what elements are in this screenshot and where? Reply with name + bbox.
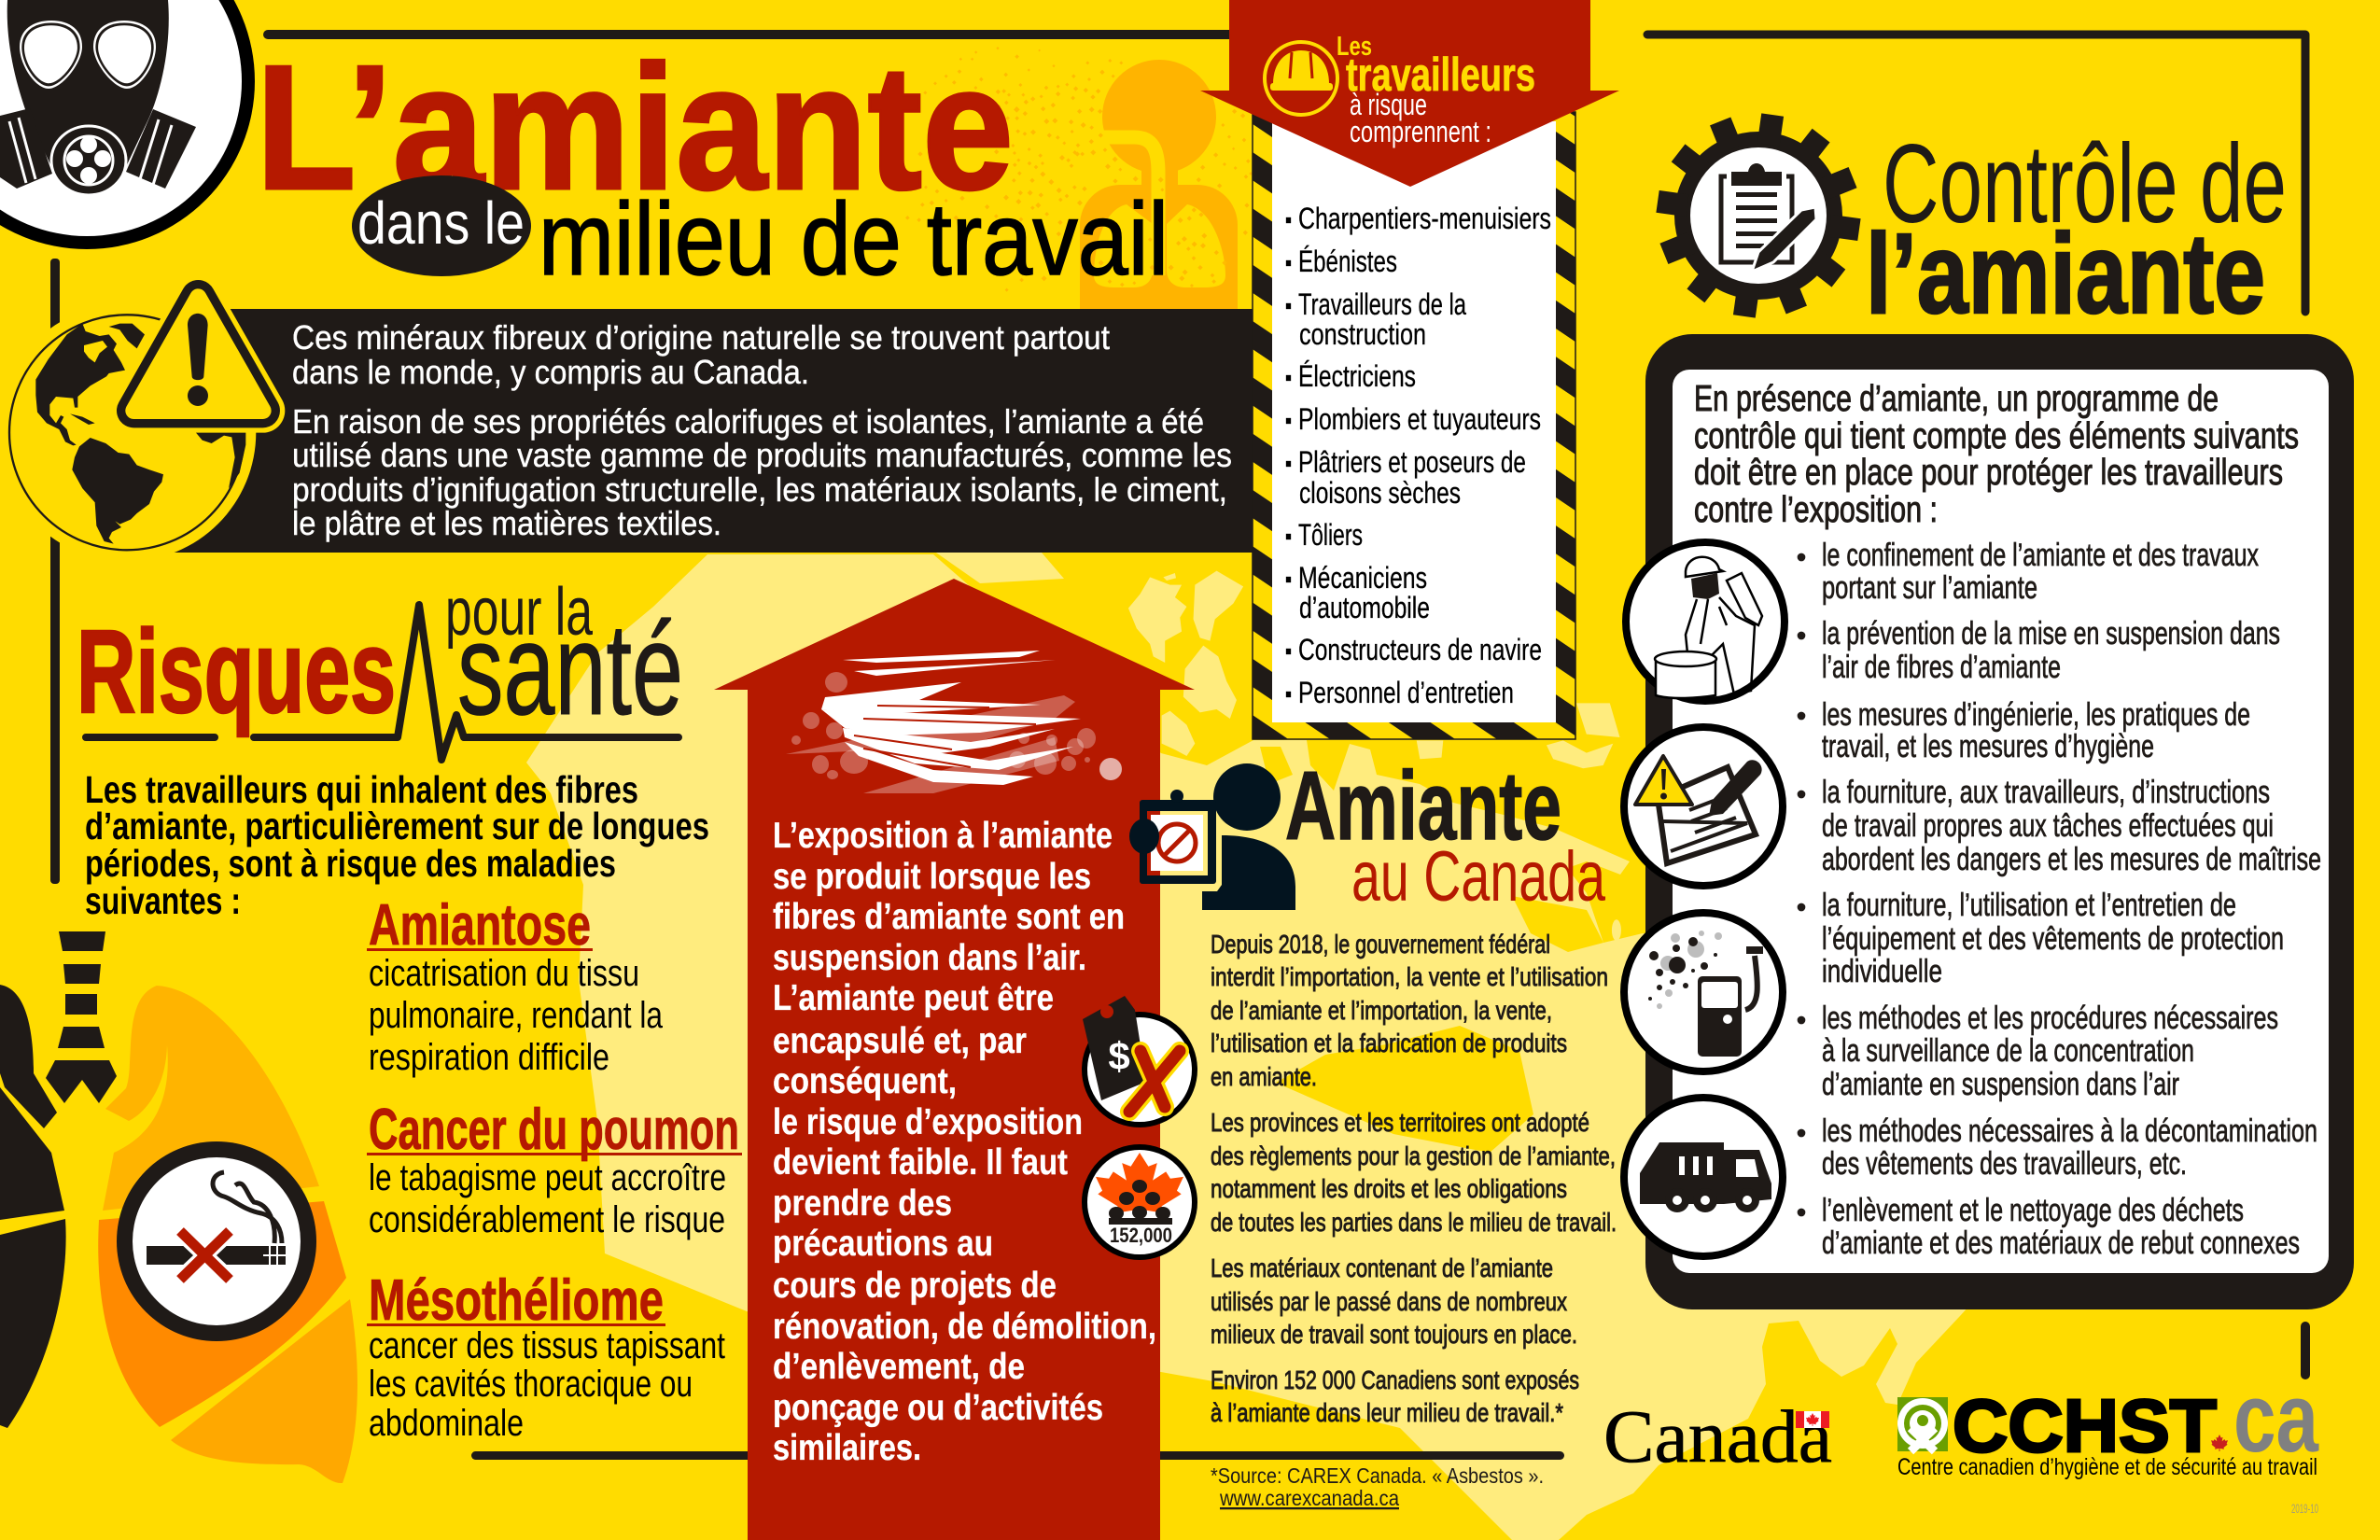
exposure text: le risque d’exposition: [773, 1102, 1083, 1142]
exposure text: L’amiante peut être: [773, 978, 1054, 1018]
list of workers: Charpentiers-menuisiers: [1298, 202, 1551, 235]
control measures list: la fourniture, l’utilisation et l’entretien de: [1822, 888, 2236, 923]
disease: asbestosis: cicatrisation du tissu: [369, 953, 639, 994]
banner: workers heading: Les: [1337, 32, 1372, 62]
exposure text: similaires.: [773, 1428, 921, 1468]
panel: introduction: le plâtre et les matières textiles.: [292, 504, 721, 542]
source citation: www.carexcanada.ca: [1219, 1486, 1399, 1510]
list of workers: Ébénistes: [1298, 245, 1397, 278]
exposure text: fibres d’amiante sont en: [773, 897, 1125, 937]
exposure text: se produit lorsque les: [773, 857, 1091, 897]
list of workers: Électriciens: [1298, 359, 1416, 393]
illustration: asbestos fibres: [786, 651, 1122, 793]
icon: warning triangle: [133, 297, 263, 411]
logo: CCHST: [1897, 1364, 2319, 1480]
date stamp: 2019-10: [2291, 1501, 2318, 1516]
list of workers: Travailleurs de la: [1298, 287, 1466, 321]
panel: introduction: utilisé dans une vaste gamme de produits manufacturés, comme les: [292, 436, 1232, 474]
text: health risk intro: Les travailleurs qui inhalent des fibres: [85, 768, 638, 811]
disease: lung cancer: Cancer du poumon: [369, 1098, 739, 1162]
text: asbestos in Canada: en amiante.: [1211, 1062, 1317, 1091]
title: milieu de travail: [539, 182, 1169, 297]
text: asbestos in Canada: Les matériaux contenant de l’amiante: [1211, 1253, 1553, 1282]
disease: asbestosis: [367, 893, 664, 1078]
bottom rule: [471, 1451, 1564, 1460]
bottom right short rule: [2301, 1322, 2310, 1379]
control measures list: travail, et les mesures d’hygiène: [1822, 729, 2154, 764]
list of workers: Personnel d’entretien: [1298, 676, 1514, 709]
exposure text: prendre des: [773, 1183, 952, 1224]
list of workers: cloisons sèches: [1299, 476, 1461, 510]
icon: waste truck: [1624, 1098, 1783, 1256]
logo: CCHST: ca: [2233, 1364, 2319, 1473]
control measures list: portant sur l’amiante: [1822, 570, 2037, 606]
icon: no smoking: [117, 1141, 316, 1341]
control measures list: individuelle: [1822, 954, 1942, 989]
icon: person with banned clipboard: [1129, 763, 1295, 910]
icon: banned sale price tag: $: [1108, 1034, 1130, 1078]
heading: health risks: Risques: [77, 606, 396, 737]
Hudson Bay on the map: [1260, 747, 1603, 1153]
text: health risk intro: suivantes :: [85, 879, 241, 922]
heading: asbestos in Canada: Amiante: [1285, 752, 1561, 861]
disease: asbestosis: respiration difficile: [369, 1037, 609, 1078]
top rule left: [263, 30, 1234, 39]
illustration: lungs: [0, 931, 357, 1483]
list of workers: Mécaniciens: [1298, 561, 1427, 595]
text: asbestos in Canada: notamment les droits et les obligations: [1211, 1174, 1567, 1203]
disease: asbestosis: Amiantose: [369, 893, 591, 958]
logo: Canada wordmark: Canada: [1603, 1396, 1832, 1478]
text: asbestos in Canada: Les provinces et les territoires ont adopté: [1211, 1108, 1589, 1137]
disease: lung cancer: considérablement le risque: [369, 1199, 725, 1240]
panel: introduction: produits d’ignifugation structurelle, les matériaux isolants, le ciment,: [292, 470, 1227, 509]
panel: introduction: [169, 309, 1253, 553]
exposure text: ponçage ou d’activités: [773, 1388, 1103, 1428]
disease: mesothelioma: cancer des tissus tapissant: [369, 1325, 725, 1366]
top rule right with corner: [1647, 35, 2305, 312]
source citation: [1211, 1463, 1544, 1510]
disease: asbestosis: pulmonaire, rendant la: [369, 995, 664, 1036]
control intro text: contre l’exposition :: [1694, 490, 1938, 530]
list of workers: [1286, 202, 1551, 709]
title: L’amiante: [256, 29, 1014, 227]
text: asbestos in Canada: l’utilisation et la fabrication de produits: [1211, 1029, 1567, 1057]
banner: workers heading: [1200, 0, 1619, 187]
banner: workers heading: comprennent :: [1350, 115, 1491, 148]
source citation: *Source: CAREX Canada. « Asbestos ».: [1211, 1463, 1544, 1488]
heading: health risks: pour la: [445, 575, 594, 650]
title: [256, 29, 1169, 297]
heading: asbestos in Canada: [1285, 752, 1606, 917]
banner: workers heading: à risque: [1350, 88, 1427, 121]
text: health risk intro: périodes, sont à risque des maladies: [85, 842, 616, 885]
heading: health risks: [77, 575, 683, 760]
icon: 152,000 workers in maple leaf: 152,000: [1110, 1224, 1172, 1247]
disease: mesothelioma: Mésothéliome: [369, 1268, 664, 1333]
text: asbestos in Canada: de l’amiante et l’importation, la vente,: [1211, 996, 1552, 1025]
panel: control programme: [1645, 334, 2354, 1309]
text: health risk intro: [85, 768, 709, 922]
control measures list: des vêtements des travailleurs, etc.: [1822, 1146, 2187, 1182]
text: asbestos in Canada: Depuis 2018, le gouvernement fédéral: [1211, 930, 1550, 959]
panel: introduction: Ces minéraux fibreux d’origine naturelle se trouvent partout: [292, 318, 1110, 357]
heading: control of asbestos: [1866, 121, 2287, 337]
list of workers: Constructeurs de navire: [1298, 633, 1542, 666]
icon: 152,000 workers in maple leaf: [1085, 1147, 1195, 1257]
exposure text: devient faible. Il faut: [773, 1142, 1068, 1183]
exposure text: encapsulé et, par: [773, 1021, 1027, 1061]
exposure text: précautions au: [773, 1224, 993, 1264]
exposure text: [773, 816, 1156, 1468]
disease: mesothelioma: les cavités thoracique ou: [369, 1364, 693, 1405]
list of workers: Plombiers et tuyauteurs: [1298, 402, 1541, 436]
icon: gas mask: [0, 0, 255, 249]
heading: control of asbestos: l’amiante: [1866, 210, 2265, 337]
disease: mesothelioma: [367, 1268, 725, 1444]
background map of Canada: [526, 546, 2053, 1540]
disease: lung cancer: [367, 1098, 742, 1240]
disease: lung cancer: le tabagisme peut accroître: [369, 1157, 726, 1198]
text: asbestos in Canada: milieux de travail sont toujours en place.: [1211, 1320, 1577, 1349]
control intro text: [1694, 379, 2299, 530]
ghost lung decoration behind title: [905, 47, 1253, 310]
list of workers: Tôliers: [1298, 518, 1363, 552]
exposure text: cours de projets de: [773, 1266, 1057, 1306]
icon: hard hat: [1265, 42, 1337, 115]
disease: mesothelioma: abdominale: [369, 1403, 524, 1444]
panel: workers at risk: [1253, 112, 1575, 739]
exposure text: suspension dans l’air.: [773, 938, 1086, 978]
list of workers: d’automobile: [1299, 591, 1430, 624]
left vertical rule: [50, 259, 60, 884]
list of workers: Plâtriers et poseurs de: [1298, 445, 1526, 479]
control measures list: à la surveillance de la concentration: [1822, 1033, 2194, 1069]
banner: workers heading: travailleurs: [1346, 49, 1535, 101]
text: asbestos in Canada: à l’amiante dans leur milieu de travail.*: [1211, 1398, 1563, 1427]
heading: health risks: santé: [457, 595, 683, 742]
exposure text: conséquent,: [773, 1061, 957, 1101]
icon: air sampling pump: [1624, 913, 1783, 1071]
control measures list: l’air de fibres d’amiante: [1822, 650, 2061, 685]
text: asbestos in Canada: [1211, 930, 1617, 1427]
icon: worker with respirator: [1626, 542, 1785, 701]
panel: introduction: dans le monde, y compris au Canada.: [292, 353, 809, 391]
control intro text: En présence d’amiante, un programme de: [1694, 379, 2219, 419]
text: asbestos in Canada: de toutes les parties dans le milieu de travail.: [1211, 1208, 1617, 1237]
icon: globe: [0, 303, 256, 562]
control measures list: d’amiante en suspension dans l’air: [1822, 1067, 2179, 1102]
text: health risk intro: d’amiante, particulièrement sur de longues: [85, 805, 709, 847]
text: asbestos in Canada: utilisés par le passé dans de nombreux: [1211, 1287, 1567, 1316]
exposure text: d’enlèvement, de: [773, 1347, 1025, 1387]
control measures list: l’enlèvement et le nettoyage des déchets: [1822, 1193, 2244, 1228]
control measures list: [1798, 538, 2321, 1261]
exposure text: rénovation, de démolition,: [773, 1307, 1156, 1347]
panel: exposure arrow: [714, 579, 1195, 1540]
text: asbestos in Canada: des règlements pour la gestion de l’amiante,: [1211, 1141, 1616, 1170]
title: dans le: [357, 189, 525, 257]
icon: banned sale price tag: [1083, 996, 1195, 1125]
exposure text: L’exposition à l’amiante: [773, 816, 1113, 856]
icon: instructions and warning: [1624, 727, 1783, 886]
heading: asbestos in Canada: au Canada: [1351, 837, 1606, 917]
text: asbestos in Canada: interdit l’importation, la vente et l’utilisation: [1211, 962, 1608, 991]
logo: CCHST: CCHST: [1953, 1384, 2217, 1467]
text: asbestos in Canada: Environ 152 000 Canadiens sont exposés: [1211, 1365, 1579, 1394]
panel: introduction: En raison de ses propriétés calorifuges et isolantes, l’amiante a été: [292, 402, 1204, 441]
icon: gear with clipboard: [1656, 113, 1861, 318]
list of workers: construction: [1299, 317, 1426, 351]
